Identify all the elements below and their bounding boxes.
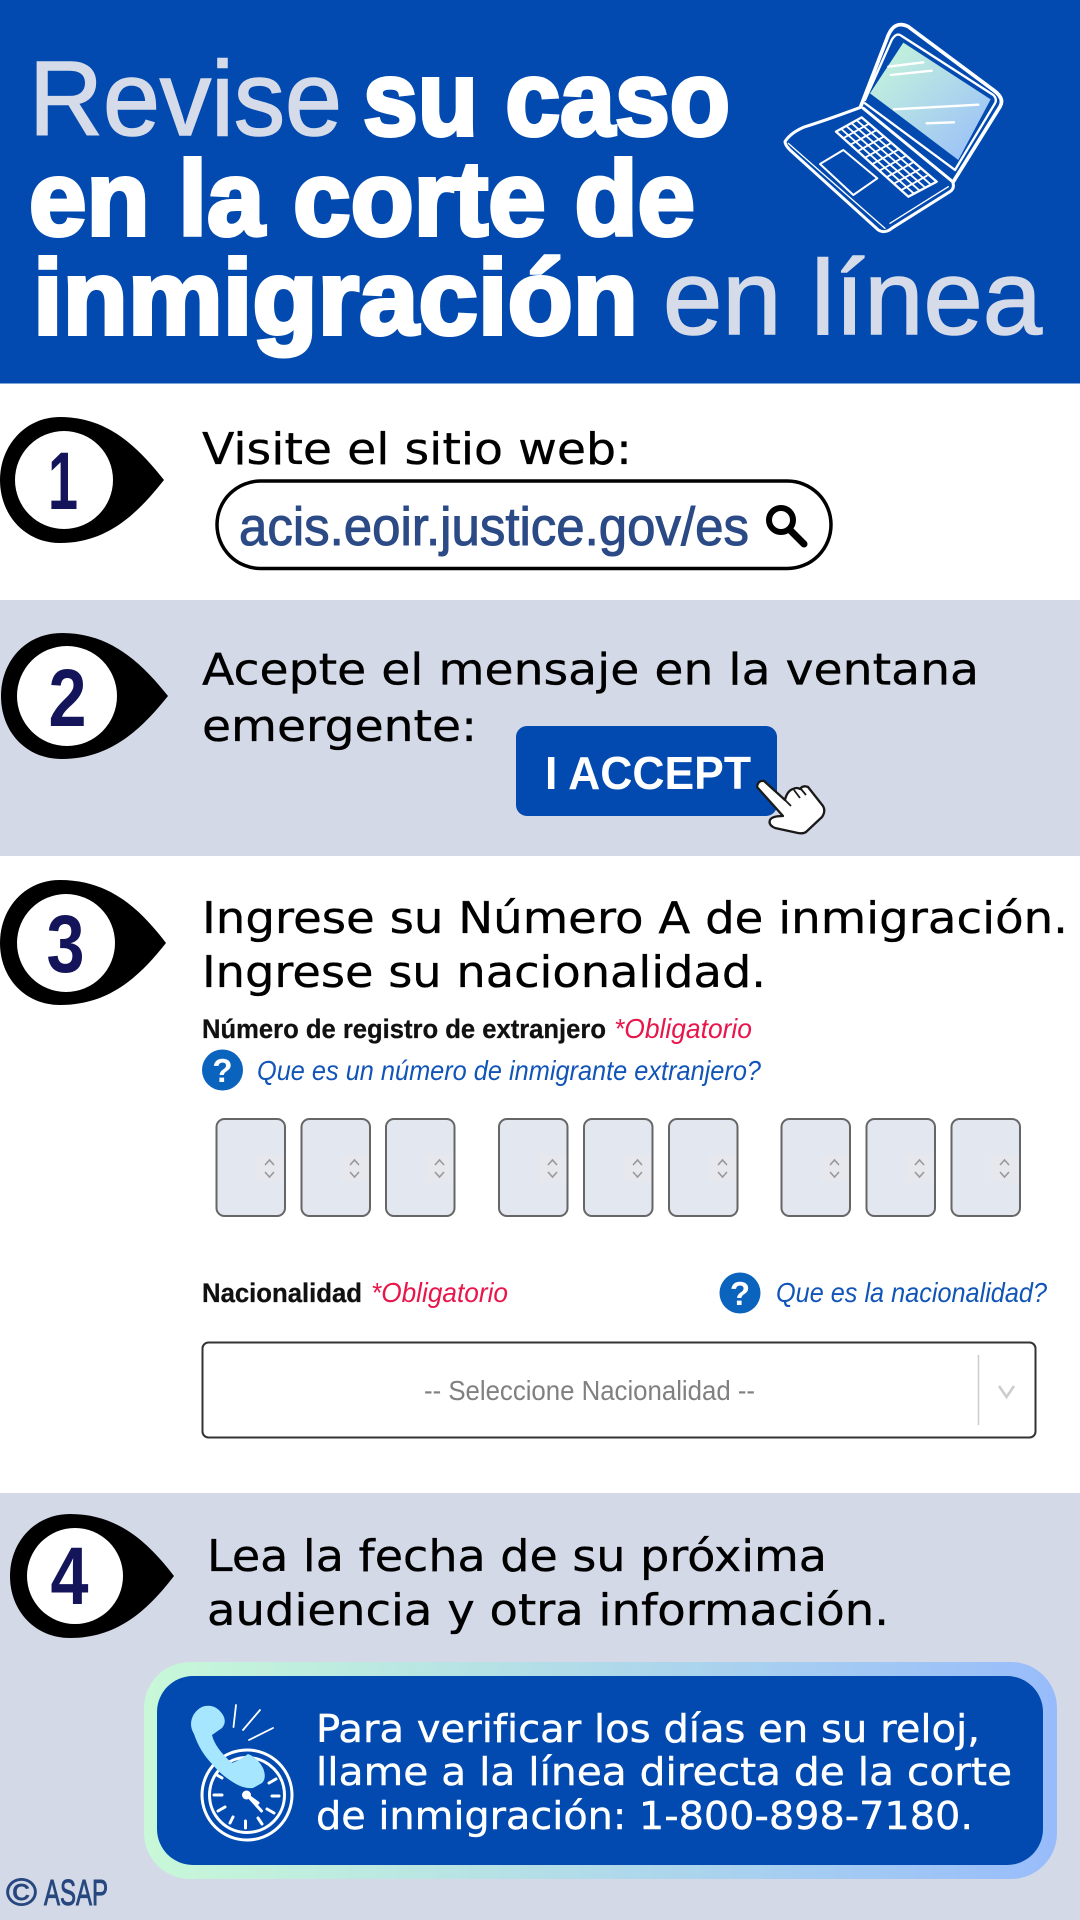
callout text: Para verificar los días en su reloj,	[316, 1707, 980, 1751]
panel: header	[0, 0, 1080, 384]
title: su caso	[363, 40, 730, 158]
title	[29, 40, 1042, 357]
step badge 4: 4	[50, 1531, 89, 1622]
credit: © ASAP: ©	[6, 1872, 37, 1914]
step badge 1: 1	[48, 436, 78, 527]
title: en línea	[663, 239, 1042, 357]
label: número de registro: *Obligatorio	[614, 1013, 752, 1044]
step 3 text	[202, 893, 1068, 998]
panel: step 3	[0, 856, 1080, 1493]
step 3 text: Ingrese su Número A de inmigración.	[202, 893, 1068, 944]
help link: número: ?	[212, 1052, 233, 1089]
title: inmigración	[33, 239, 638, 357]
label: nacionalidad: Nacionalidad	[202, 1278, 362, 1308]
step 3 text: Ingrese su nacionalidad.	[202, 947, 766, 998]
help link: nacionalidad	[720, 1272, 1047, 1314]
label: nacionalidad: *Obligatorio	[371, 1277, 508, 1308]
search bar	[217, 481, 831, 568]
nationality dropdown: -- Seleccione Nacionalidad --	[424, 1375, 755, 1406]
panel: step 2	[0, 600, 1080, 856]
step badge 2: 2	[48, 653, 86, 744]
step badge 3	[0, 880, 166, 1005]
step badge 1	[0, 417, 164, 543]
step 4 text: Lea la fecha de su próxima	[207, 1531, 827, 1582]
step 4 text	[207, 1531, 889, 1636]
callout: hotline	[144, 1662, 1057, 1879]
help link: número	[202, 1050, 761, 1090]
callout text: llame a la línea directa de la corte	[316, 1750, 1012, 1794]
search bar: acis.eoir.justice.gov/es	[239, 497, 749, 557]
step badge 4	[10, 1514, 174, 1638]
icon: clock	[202, 1750, 292, 1840]
step 2 text	[202, 644, 979, 752]
help link: nacionalidad: ?	[730, 1275, 750, 1312]
help link: nacionalidad: Que es la nacionalidad?	[776, 1277, 1047, 1308]
button: I accept	[516, 726, 777, 816]
label: número de registro: Número de registro de extranjero	[202, 1014, 606, 1044]
help link: número: Que es un número de inmigrante extranjero?	[257, 1055, 761, 1086]
icon: pointing hand	[757, 781, 824, 833]
panel: step 4	[0, 1493, 1080, 1920]
step badge 3: 3	[46, 899, 84, 990]
title: en la corte de	[29, 140, 695, 258]
credit: © ASAP	[6, 1872, 108, 1914]
step 1 text: Visite el sitio web:	[202, 424, 632, 475]
nationality dropdown	[202, 1342, 1036, 1438]
step 4 text: audiencia y otra información.	[207, 1585, 889, 1636]
label: nacionalidad	[202, 1277, 508, 1308]
panel: step 1	[0, 384, 1080, 600]
step 2 text: emergente:	[202, 701, 477, 752]
icon: magnifier	[769, 508, 804, 544]
title: Revise	[29, 40, 342, 158]
callout text	[316, 1707, 1012, 1838]
button: I accept: I ACCEPT	[545, 747, 751, 799]
credit: © ASAP: ASAP	[44, 1872, 108, 1913]
icon: laptop	[785, 25, 1001, 232]
callout text: de inmigración: 1-800-898-7180.	[316, 1794, 973, 1838]
icon: phone	[191, 1705, 273, 1788]
step badge 2	[1, 633, 168, 759]
A-number input boxes	[216, 1119, 1020, 1216]
step 2 text: Acepte el mensaje en la ventana	[202, 644, 979, 696]
